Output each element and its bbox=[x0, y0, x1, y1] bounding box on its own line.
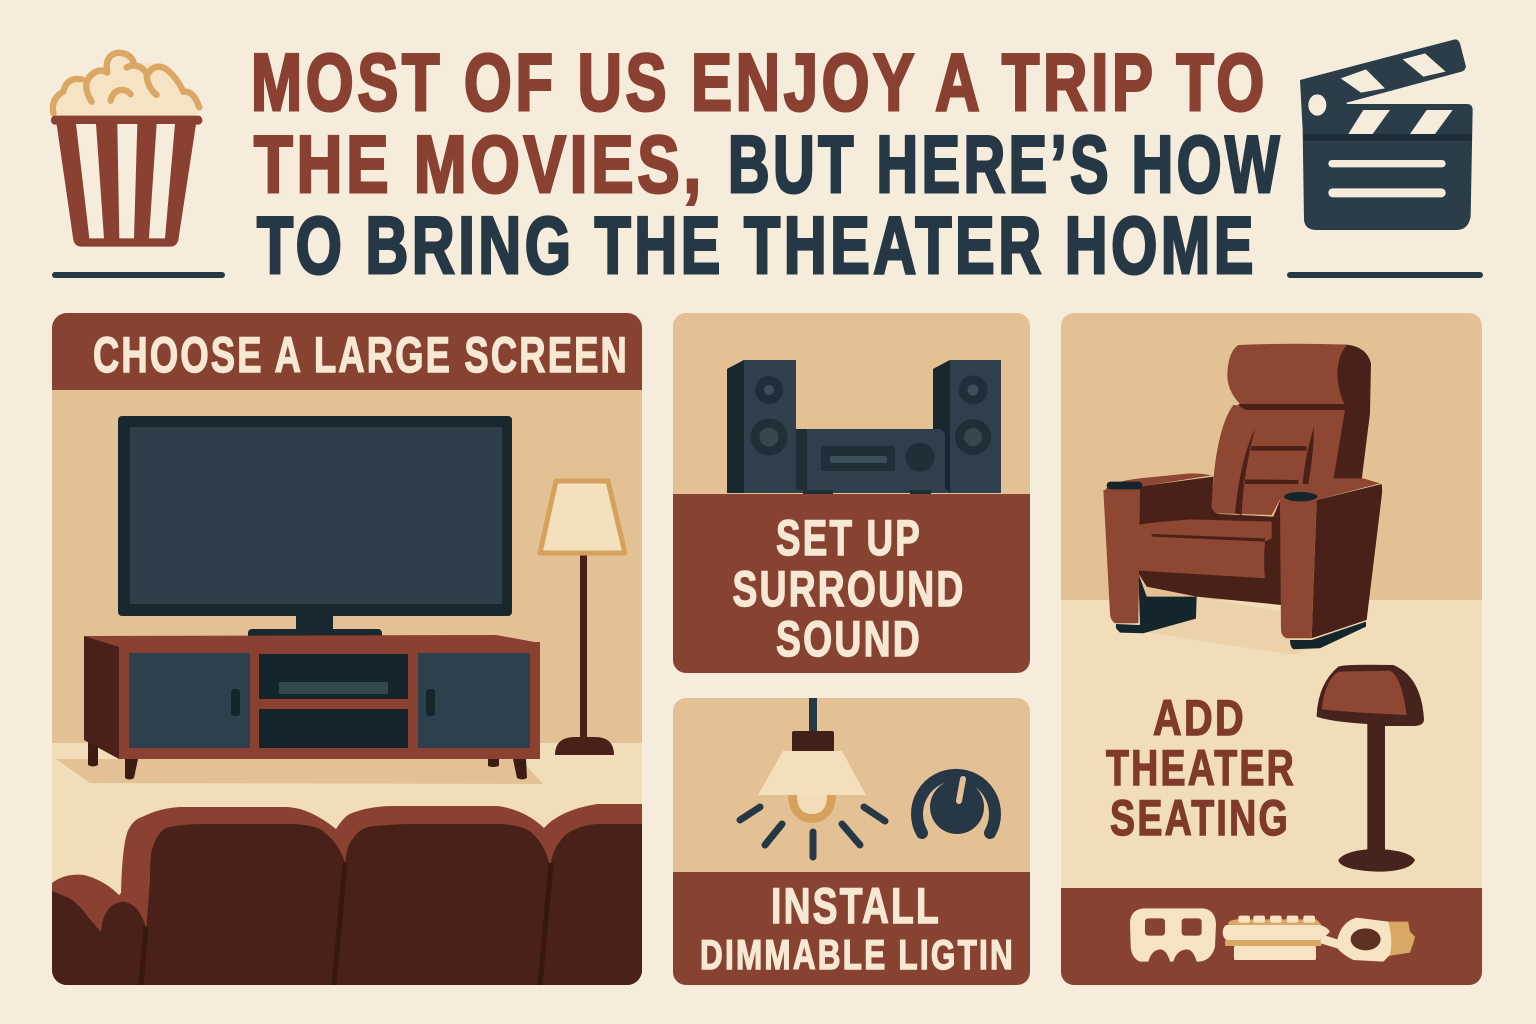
icons: footer accessories bbox=[1130, 908, 1415, 962]
icon: snack tray bbox=[1223, 916, 1330, 960]
panel: install dimmable lighting bbox=[673, 698, 1030, 985]
title: BUT HERE’S HOW bbox=[728, 120, 1283, 210]
icon: side table bbox=[1317, 665, 1424, 872]
label bbox=[732, 519, 962, 658]
television bbox=[118, 416, 512, 640]
icon: popcorn bucket bbox=[50, 50, 202, 247]
title: THE MOVIES, bbox=[254, 120, 705, 210]
icon: speakers and receiver bbox=[727, 360, 1001, 494]
icon: 3d glasses bbox=[1130, 908, 1216, 962]
panel: set up surround sound bbox=[673, 313, 1030, 673]
label: THEATER bbox=[1106, 740, 1296, 796]
rule: left of title bbox=[55, 272, 222, 278]
media cabinet bbox=[56, 635, 543, 784]
label: DIMMABLE LIGTIN bbox=[700, 931, 1015, 978]
label: SURROUND bbox=[732, 561, 966, 617]
panel: choose a large screen bbox=[52, 313, 642, 985]
icon: cup holder bbox=[1321, 918, 1415, 962]
label: SEATING bbox=[1110, 790, 1290, 846]
label bbox=[1106, 700, 1294, 836]
panel: add theater seating bbox=[1061, 313, 1482, 985]
label: SET UP bbox=[776, 510, 922, 566]
rule: right of title bbox=[1290, 272, 1480, 278]
header band: CHOOSE A LARGE SCREEN bbox=[93, 327, 629, 383]
title bbox=[251, 38, 1283, 291]
label: ADD bbox=[1153, 690, 1246, 746]
icon: dimmer dial bbox=[917, 775, 995, 834]
sofa bbox=[52, 804, 642, 985]
icon: recliner chair bbox=[1103, 344, 1382, 655]
icon: pendant light bbox=[740, 698, 885, 857]
icon: clapperboard bbox=[1300, 39, 1473, 230]
label: SOUND bbox=[776, 611, 922, 667]
label: INSTALL bbox=[771, 878, 941, 934]
label bbox=[702, 887, 1012, 970]
header band bbox=[52, 313, 642, 390]
floor lamp bbox=[540, 481, 625, 755]
